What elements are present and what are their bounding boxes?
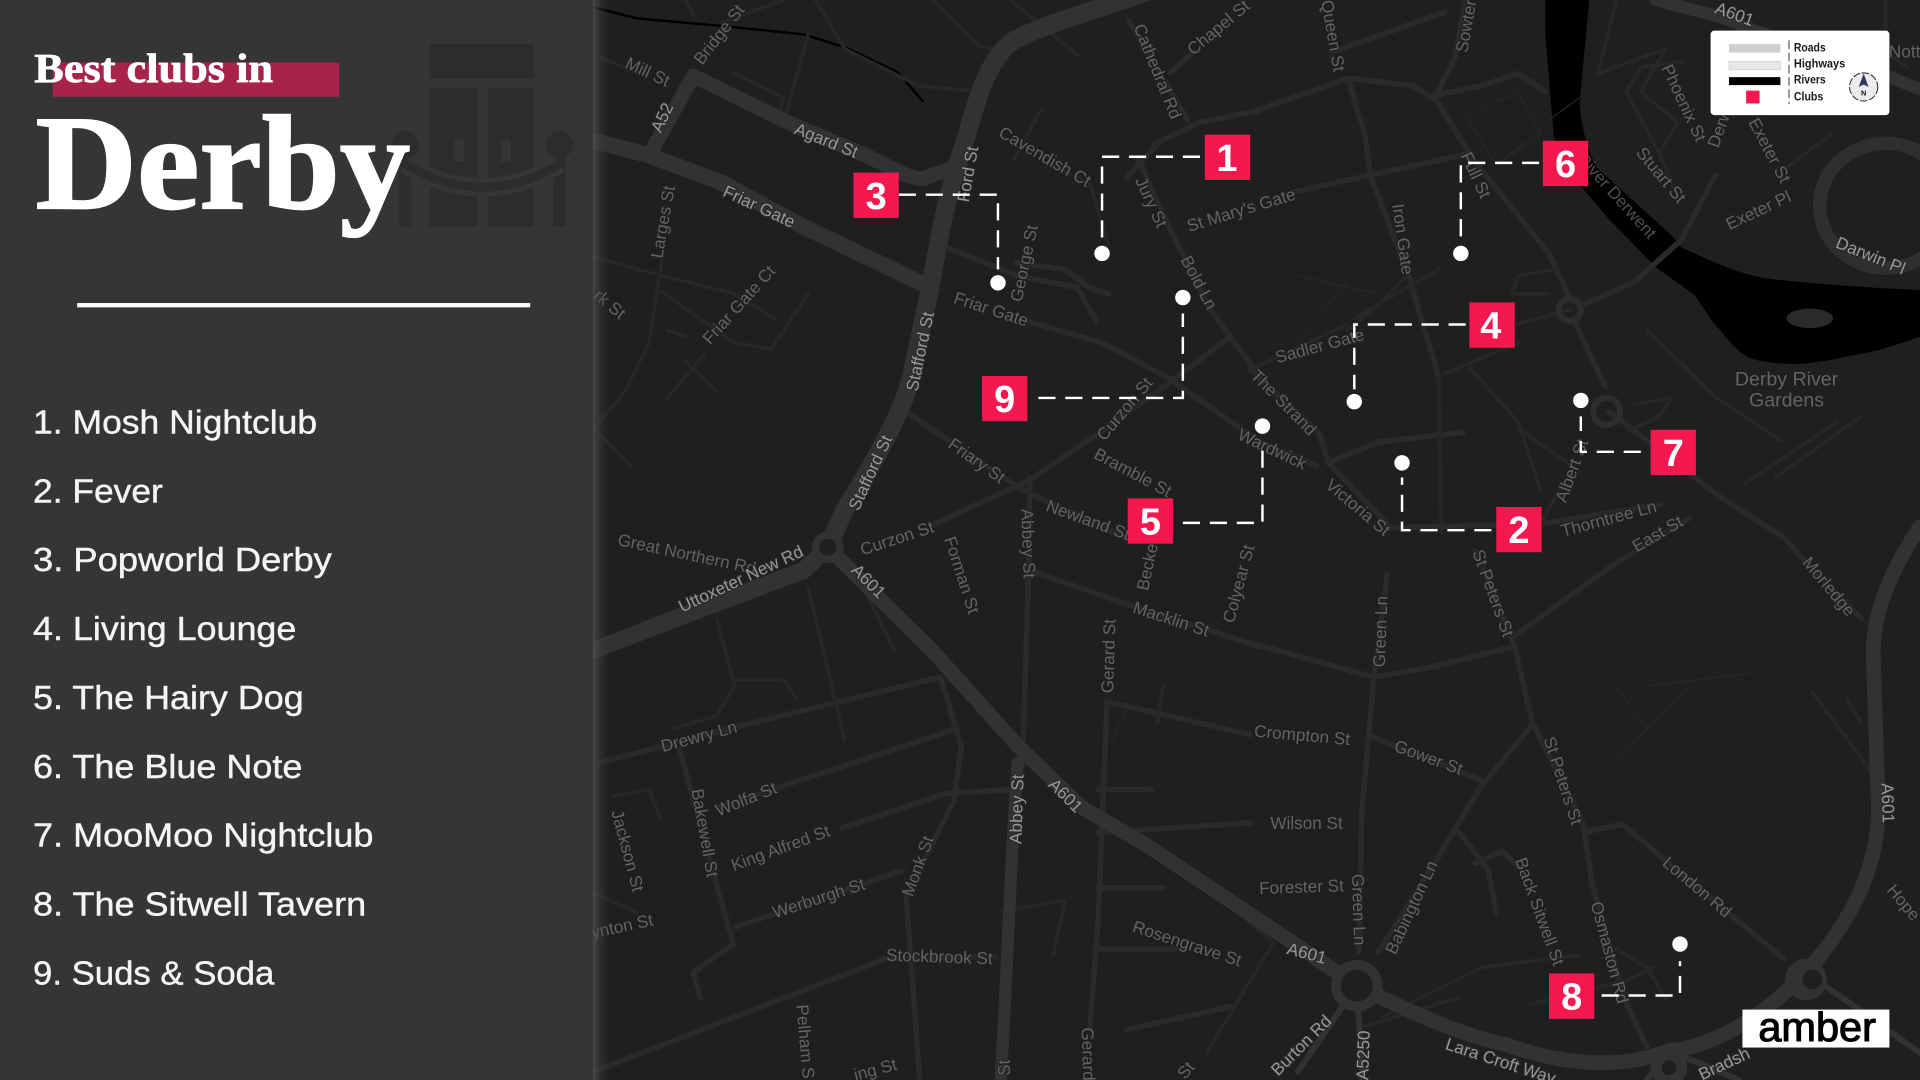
street labels: Drewry Ln [659, 716, 739, 756]
street labels: Mill St [622, 53, 673, 91]
item 9: 9. Suds & Soda [33, 955, 275, 992]
street labels: Wardwick [1235, 424, 1310, 474]
street labels: Larges St [646, 184, 679, 260]
marker 8: 8 [1561, 977, 1582, 1019]
street labels: Wilson St [1270, 813, 1343, 833]
street labels: Green Ln [1348, 874, 1370, 946]
street labels: Victoria St [1322, 475, 1395, 540]
panel: sidebar [0, 0, 593, 1080]
legend labels: Roads [1794, 41, 1826, 54]
street labels: Cathedral Rd [1130, 21, 1186, 122]
street labels: Gower St [1392, 736, 1466, 779]
marker 1 [1094, 135, 1250, 261]
item 7: 7. MooMoo Nightclub [33, 818, 373, 855]
street labels: Jackson St [607, 808, 648, 894]
item 6: 6. The Blue Note [33, 749, 302, 786]
street labels: Gerard [1078, 1027, 1099, 1080]
street labels: Thorntree Ln [1559, 496, 1659, 541]
title: Derby: Derby [36, 89, 410, 238]
street labels: Newland St [1044, 495, 1133, 544]
marker 3 [853, 173, 1006, 291]
street labels: A601 [1877, 783, 1899, 823]
item 4: 4. Living Lounge [33, 611, 296, 648]
street labels: George St [1006, 223, 1042, 303]
street labels: Monk St [897, 833, 938, 899]
street labels: Queen St [1317, 0, 1349, 73]
street labels: Friar Gate Ct [698, 261, 780, 348]
street labels: Back Sitwell St [1511, 855, 1569, 968]
street labels: Friar Gate [951, 288, 1031, 330]
icon: compass: N [1861, 89, 1866, 98]
street labels: Stuart St [1632, 143, 1691, 207]
street labels: ynton St [589, 910, 655, 942]
item 3: 3. Popworld Derby [33, 542, 332, 579]
highlight bar [53, 62, 339, 97]
marker 8 [1549, 936, 1688, 1019]
street labels: London Rd [1659, 852, 1736, 921]
item 5: 5. The Hairy Dog [33, 680, 304, 717]
street labels: Derby River [1735, 369, 1839, 391]
street labels [589, 0, 1920, 1080]
street labels: Full St [1457, 149, 1495, 201]
marker 1: 1 [1216, 138, 1237, 180]
legend labels: Rivers [1794, 73, 1826, 86]
street labels: Bridge St [689, 0, 749, 68]
street labels: Ford St [953, 144, 982, 203]
street labels: Rosengrave St [1130, 916, 1244, 970]
street labels: Wolfa St [712, 778, 780, 820]
street labels: Stockbrook St [886, 945, 993, 968]
street labels: Green Ln [1369, 596, 1391, 668]
street labels: King Alfred St [728, 821, 833, 875]
street labels: Phoenix St [1658, 61, 1711, 145]
legend labels [1794, 41, 1845, 103]
street labels: Iron Gate [1388, 202, 1418, 276]
street labels: St Peters St [1468, 547, 1518, 640]
street labels: Derwent [1703, 83, 1744, 150]
marker 6 [1453, 141, 1588, 261]
club list [33, 404, 373, 992]
sidebar edge shadow [593, 0, 610, 1080]
street labels: A601 [1285, 938, 1329, 968]
icon: compass [1850, 73, 1878, 101]
minor streets [594, 0, 1908, 1078]
street labels: Agard St [792, 118, 861, 162]
legend swatches [1729, 44, 1780, 103]
legend labels: Highways [1794, 57, 1845, 70]
street labels: A52 [646, 99, 677, 136]
street labels: Macklin St [1131, 597, 1212, 641]
street labels: Morledge [1798, 553, 1860, 620]
item 1: 1. Mosh Nightclub [33, 404, 317, 441]
street labels: Becket [1132, 537, 1163, 592]
street labels: East St [1628, 511, 1687, 556]
item 8: 8. The Sitwell Tavern [33, 887, 366, 924]
item 2: 2. Fever [33, 473, 163, 510]
major roads [594, 0, 1920, 1080]
marker 6: 6 [1555, 144, 1576, 186]
marker 2 [1394, 455, 1542, 552]
street labels: Abbey St [1005, 774, 1028, 844]
street labels: Great Northern Rd [616, 529, 758, 578]
street labels: Burton Rd [1267, 1011, 1335, 1079]
marker 9 [982, 290, 1191, 421]
marker 2: 2 [1508, 510, 1530, 552]
street labels: Exeter St [1744, 114, 1795, 186]
title: Best clubs in: Best clubs in [34, 46, 273, 92]
street labels: Forman St [940, 534, 984, 616]
street labels: St Peters St [1540, 734, 1587, 827]
divider [77, 303, 530, 307]
legend [1711, 31, 1889, 115]
street labels: Darwin Pl [1833, 232, 1909, 278]
street labels: Bakewell St [687, 787, 723, 879]
icon: club doors with rope [392, 44, 573, 227]
street labels: Osmaston Rd [1587, 899, 1633, 1005]
marker 3: 3 [866, 176, 887, 218]
street labels: Exeter Pl [1723, 186, 1794, 234]
logo: amber: amber [1758, 1004, 1876, 1050]
street labels: Colyear St [1218, 542, 1258, 625]
street labels: Werburgh St [770, 874, 867, 922]
marker 4: 4 [1480, 306, 1501, 348]
street labels: Curzon St [858, 517, 936, 559]
street labels: Gardens [1749, 390, 1824, 412]
street labels: Jury St [1131, 174, 1172, 231]
street labels: Friar Gate [720, 181, 798, 232]
street labels: Pelham S [792, 1004, 819, 1079]
street labels: River Derwent [1573, 149, 1661, 243]
street labels: Crompton St [1253, 721, 1351, 749]
street labels: Abbey St [1017, 508, 1040, 579]
street labels: The Strand [1247, 365, 1321, 439]
street labels: Stafford St [902, 310, 938, 393]
legend labels: Clubs [1794, 90, 1823, 103]
street labels: Friary St [945, 434, 1009, 487]
street labels: Gerard St [1097, 618, 1120, 694]
marker 4 [1347, 302, 1515, 409]
street labels: St [994, 1059, 1014, 1076]
street labels: Babington Ln [1381, 857, 1442, 957]
street labels: Forester St [1259, 875, 1344, 898]
marker 9: 9 [994, 379, 1015, 421]
street labels: Uttoxeter New Rd [675, 541, 806, 616]
street labels: rk St [590, 285, 630, 323]
street labels: A5250 [1352, 1030, 1374, 1080]
river: Derwent [594, 0, 1920, 364]
marker 7 [1573, 393, 1696, 475]
marker 5 [1128, 418, 1270, 544]
street labels: Albert St [1551, 436, 1592, 505]
street labels: Cavendish Ct [996, 122, 1095, 191]
street labels: A601 [1045, 774, 1087, 817]
street labels: Curzon St [1092, 373, 1157, 444]
street labels: Stafford St [844, 432, 896, 513]
marker 7: 7 [1663, 433, 1684, 475]
street labels: St Mary's Gate [1184, 184, 1298, 236]
street labels: Bold Ln [1177, 252, 1222, 313]
street labels: Sadler Gate [1273, 324, 1366, 367]
marker 5: 5 [1140, 501, 1161, 543]
street labels: Bramble St [1091, 444, 1175, 501]
map: streets and river [589, 0, 1920, 1080]
street labels: A601 [848, 560, 890, 602]
